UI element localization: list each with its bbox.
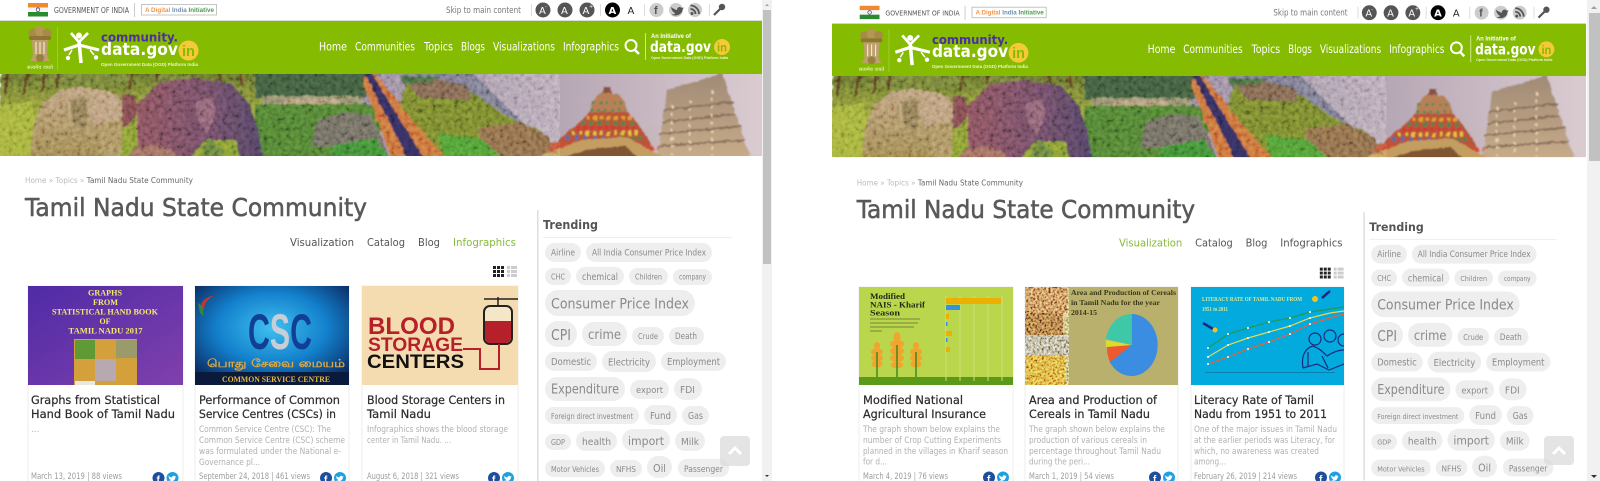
tag cloud: crime [1414,329,1446,344]
card description: Common Service Centre (CSC) scheme [199,436,345,446]
digital india badge: A Digital India Initiative [975,10,1044,17]
tag cloud: Passenger [1509,464,1548,474]
tag cloud: Fund [1475,411,1496,422]
main menu: Visualizations [493,40,555,54]
tag cloud: GDP [1377,438,1392,447]
thumbnail: cereals pie chart: Area and Production of Cereals [1071,288,1176,297]
main menu [1148,42,1445,56]
card description: The graph shown below explains the [862,425,1000,435]
tag cloud: All India Consumer Price Index [1418,249,1531,259]
thumbnail: literacy line chart: LITERACY RATE OF TAMIL NADU FROM [1202,297,1302,303]
data.gov initiative logo: data.gov [650,38,711,56]
accessibility font buttons: A [561,6,568,17]
accessibility font buttons: + [1415,7,1419,13]
card description: Infographics shows the blood storage [367,425,508,435]
share icons [1149,472,1175,481]
icon: state emblem: सत्यमेव जयते [27,64,53,71]
tag cloud: Oil [1478,461,1491,474]
tag cloud: Milk [1506,437,1524,448]
social icons: f [1479,8,1483,20]
logo wordmark: data.gov [101,40,178,60]
icon: login key [714,4,725,15]
thumbnail: CSC [195,286,349,385]
tag cloud: export [1461,386,1489,396]
main menu: Home [1148,42,1175,56]
social icons: f [654,5,658,17]
logo wordmark: community. [101,30,178,44]
tabs: Visualization [290,236,354,249]
card description: for d... [863,458,887,468]
sidebar heading: Trending [1369,220,1424,234]
data.gov initiative logo: An Initiative of [651,34,692,40]
share icons [320,472,346,481]
thumbnail: NAIS Kharif bar chart: Modified [870,292,906,301]
tag cloud: chemical [582,272,618,283]
accessibility font buttons: A [1365,9,1372,20]
icon: Indian flag [28,3,48,16]
card description: Governance pl... [199,458,260,468]
card title: Tamil Nadu [366,407,431,421]
thumbnail: purple book cover: TAMIL NADU 2017 [68,326,142,336]
tabs [1119,236,1343,249]
tag cloud: health [1408,437,1437,448]
back to top button [1544,436,1574,465]
tag cloud: Airline [1377,249,1401,259]
tag cloud: CHC [1377,274,1391,283]
card description: during the peri... [1029,458,1090,468]
share icons [983,472,1009,481]
thumbnail: purple book cover [28,286,183,385]
logo wordmark: in [1012,46,1025,62]
tag cloud: Electricity [1434,358,1475,369]
accessibility font buttons: A [1408,9,1415,20]
card title [863,393,986,421]
tag cloud: GDP [551,438,565,447]
card description: ... [31,425,39,435]
data.gov initiative logo [650,34,730,60]
card description: planned in the villages in Kharif season [863,447,1008,457]
icon: Indian flag [860,6,879,19]
card description: center in Tamil Nadu. ... [367,436,451,446]
thumbnail: literacy line chart: 1951 to 2011 [1202,307,1228,313]
tabs: Infographics [1280,236,1343,249]
main menu: Topics [423,40,453,54]
data.gov initiative logo: in [1541,43,1551,57]
icon: grid and list toggles [1320,268,1344,278]
data.gov initiative logo: An Initiative of [1476,36,1516,42]
tag cloud: Death [675,332,697,342]
card description: percentage throughout Tamil Nadu [1029,447,1161,457]
tag cloud: CPI [551,326,571,344]
icon: state emblem: सत्यमेव जयते [859,66,885,73]
tag cloud: Foreign direct investment [1377,412,1458,421]
icon: state emblem [27,26,53,71]
card description: Common Service Centre (CSC): The [199,425,331,435]
tag cloud: Consumer Price Index [551,296,689,312]
main menu: Infographics [1389,42,1445,56]
government label: GOVERNMENT OF INDIA [885,9,960,18]
social icons [650,3,702,17]
share icons [488,472,514,481]
data.gov initiative logo [1475,36,1554,62]
card title: Nadu from 1951 to 2011 [1194,407,1327,421]
tag cloud: Milk [681,437,699,448]
icon: grid and list toggles [493,266,517,277]
tag cloud: NFHS [1442,464,1461,473]
data.gov initiative logo: in [717,40,727,54]
sidebar: trending tags [1363,212,1556,480]
card description [1194,425,1337,468]
tag cloud: Fund [650,411,671,422]
accessibility font buttons: A [1387,9,1394,20]
thumbnail: CSC: பொது சேவை மையம் [207,357,345,371]
card title [366,393,505,421]
thumbnail: literacy line chart [1191,287,1350,385]
breadcrumb: Home » Topics » Tamil Nadu State Community [25,176,193,185]
main menu: Communities [355,40,415,54]
right lower group: heading, tabs and sidebar [856,178,1556,480]
panel: left page screenshot [0,0,772,481]
accessibility font buttons [536,2,594,18]
thumbnail: NAIS Kharif bar chart: Season [870,308,901,318]
tag cloud: Expenditure [551,382,619,398]
tag cloud: Electricity [608,358,650,368]
tag cloud: Domestic [1377,358,1417,369]
tag cloud: import [628,434,664,448]
digital india badge: A Digital India Initiative [145,7,214,14]
icon: search [1451,42,1464,56]
icon: login key [1539,7,1550,18]
logo wordmark: data.gov [932,41,1008,61]
tabs: Blog [418,236,440,249]
thumbnail: cereals pie chart [1025,287,1178,385]
tag cloud: company [1504,274,1531,283]
tag cloud: health [582,437,611,448]
accessibility font buttons [1362,5,1420,20]
tag cloud: CPI [1377,327,1397,345]
thumbnail: cereals pie chart: in Tamil Nadu for the year [1071,298,1161,307]
logo wordmark: Open Government Data (OGD) Platform India [932,64,1028,69]
card description [862,425,1008,468]
accessibility font buttons: + [589,4,593,10]
main menu: Home [319,40,347,54]
card title [1029,393,1158,421]
government label: GOVERNMENT OF INDIA [54,6,130,15]
card description: One of the major issues in Tamil Nadu [1194,425,1337,435]
tag cloud: Children [1460,274,1487,283]
tag cloud: Children [635,272,662,282]
thumbnail: purple book cover: STATISTICAL HAND BOOK [52,308,159,316]
digital india badge [972,7,1046,18]
card description: number of Crop Cutting Experiments [863,436,1001,446]
contrast buttons: A [1453,9,1460,20]
tag cloud: Passenger [684,465,723,475]
card description: was formulated under the National e- [199,447,341,457]
card title: Literacy Rate of Tamil [1194,393,1314,407]
tag cloud: Motor Vehicles [551,465,599,474]
card: Literacy Rate of Tamil Nadu [1191,287,1350,481]
tag cloud: Motor Vehicles [1377,464,1425,473]
tabs [290,236,516,249]
card title: Performance of Common [199,393,340,407]
card title: Modified National [863,393,963,407]
social icons [1475,6,1527,20]
card: Performance of Common Service Centres [195,286,349,481]
card title [199,393,340,421]
accessibility font buttons: A [582,6,590,17]
contrast buttons: A [628,6,634,17]
tag cloud: Oil [653,462,666,475]
top utility bar [28,2,725,18]
accessibility font buttons: - [1371,7,1373,13]
card description [199,425,345,468]
card title: Agricultural Insurance [863,407,986,421]
icon: state emblem [859,29,885,73]
thumbnail: NAIS Kharif bar chart [859,287,1013,385]
tag cloud: Airline [551,248,575,258]
data.gov initiative logo: data.gov [1475,41,1536,58]
tag cloud [1371,245,1553,477]
tag cloud: Employment [667,357,720,368]
tag cloud: Foreign direct investment [551,412,633,421]
logo wordmark [101,30,198,67]
tag cloud: Expenditure [1377,383,1445,398]
thumbnail: purple book cover: GRAPHS [88,288,123,298]
card description: production of various cereals in [1029,436,1147,446]
main menu: Visualizations [1320,42,1381,56]
thumbnail: blood storage: CENTERS [367,352,464,373]
data.gov initiative logo: Open Government Data (OGD) Platform India [1476,58,1553,62]
skip link: Skip to main content [1273,8,1348,18]
tag cloud: company [679,272,706,282]
thumbnail: purple book cover: FROM [93,298,118,307]
breadcrumb: Home » Topics » Tamil Nadu State Community [857,178,1023,187]
thumbnail: NAIS Kharif bar chart: NAIS - Kharif [870,300,925,310]
tag cloud: FDI [1505,385,1520,396]
card description: which, no awareness was created [1194,447,1319,457]
tag cloud: Crude [638,332,658,341]
tag cloud: export [636,386,663,396]
thumbnail: CSC: COMMON SERVICE CENTRE [222,375,330,384]
card: Area and Production of Cereals [1025,287,1178,481]
tag cloud: import [1453,434,1490,448]
tag cloud: NFHS [616,465,636,474]
page heading: Tamil Nadu State Community [24,193,367,222]
card title [1194,393,1327,421]
card description: among... [1194,458,1226,468]
card title: Cereals in Tamil Nadu [1029,407,1150,421]
logo wordmark: community. [932,33,1008,47]
card title [31,393,175,421]
main menu [319,40,619,54]
sidebar heading: Trending [543,218,598,232]
card description: at the earlier periods was Literacy, for [1194,436,1335,446]
contrast buttons [1431,5,1460,20]
tag cloud: Consumer Price Index [1377,298,1514,314]
sidebar: trending tags [537,210,732,481]
green navigation bar [0,21,762,74]
thumbnail: cereals pie chart: 2014-15 [1071,308,1097,317]
tag cloud: Gas [688,411,703,422]
tag cloud: Domestic [551,357,591,368]
tabs: Catalog [1195,236,1233,249]
tag cloud: All India Consumer Price Index [592,248,706,258]
top utility bar [860,5,1550,20]
tabs: Catalog [367,236,405,249]
tag cloud: Gas [1513,411,1528,422]
share icons [152,472,178,481]
share icons [1315,472,1341,481]
scrollbar [1587,0,1600,481]
page heading: Tamil Nadu State Community [856,195,1195,224]
tag cloud: Employment [1492,358,1545,369]
logo wordmark: in [182,43,195,60]
icon: search [626,40,639,54]
tag cloud [545,243,729,478]
card title: Graphs from Statistical [31,393,160,407]
thumbnail: CSC: CSC [248,304,312,360]
card title: Hand Book of Tamil Nadu [31,407,175,421]
logo wordmark: Open Government Data (OGD) Platform India [101,62,198,67]
digital india badge [142,4,216,15]
tabs: Infographics [453,236,516,249]
panel: right page screenshot [827,0,1600,481]
right header group [827,5,1594,172]
scrollbar [762,0,772,481]
icon: community figure [895,35,930,65]
tag cloud: chemical [1408,273,1444,284]
main menu: Topics [1251,42,1280,56]
data.gov initiative logo: Open Government Data (OGD) Platform India [651,56,729,60]
accessibility font buttons: A [539,6,546,17]
skip link: Skip to main content [446,6,522,16]
thumbnail: blood storage: BLOOD [368,313,455,340]
main menu: Infographics [563,40,619,54]
accessibility font buttons: - [545,4,547,10]
tag cloud: FDI [680,385,695,396]
logo wordmark [932,33,1028,69]
tag cloud: Death [1500,332,1522,342]
tag cloud: CHC [551,272,565,282]
card title: Area and Production of [1029,393,1158,407]
card description: The graph shown below explains the [1028,425,1165,435]
card: Blood Storage Centers [362,286,518,481]
thumbnail: blood storage: STORAGE [368,335,463,356]
card: Modified National Agricultural Insurance [859,287,1013,481]
thumbnail: purple book cover: OF [100,317,111,326]
tag cloud: Crude [1463,333,1483,342]
tag cloud: crime [588,327,621,343]
card: Graphs from Statistical Hand Book [28,286,183,481]
thumbnail: blood storage [362,286,518,385]
back to top button [720,436,750,466]
main menu: Communities [1183,42,1243,56]
card description [1028,425,1165,468]
main menu: Blogs [1288,42,1312,56]
contrast buttons [605,2,634,18]
contrast buttons: A [608,6,616,17]
card description [367,425,508,446]
banner photo: Tamil Nadu collage [827,72,1594,172]
banner photo: Tamil Nadu collage [0,70,770,171]
tabs: Visualization [1119,236,1182,249]
tabs: Blog [1246,236,1267,249]
main menu: Blogs [461,40,485,54]
card title: Blood Storage Centers in [367,393,505,407]
green navigation bar [832,24,1586,76]
contrast buttons: A [1434,9,1442,20]
card title: Service Centres (CSCs) in [199,407,336,421]
icon: community figure [64,32,99,63]
